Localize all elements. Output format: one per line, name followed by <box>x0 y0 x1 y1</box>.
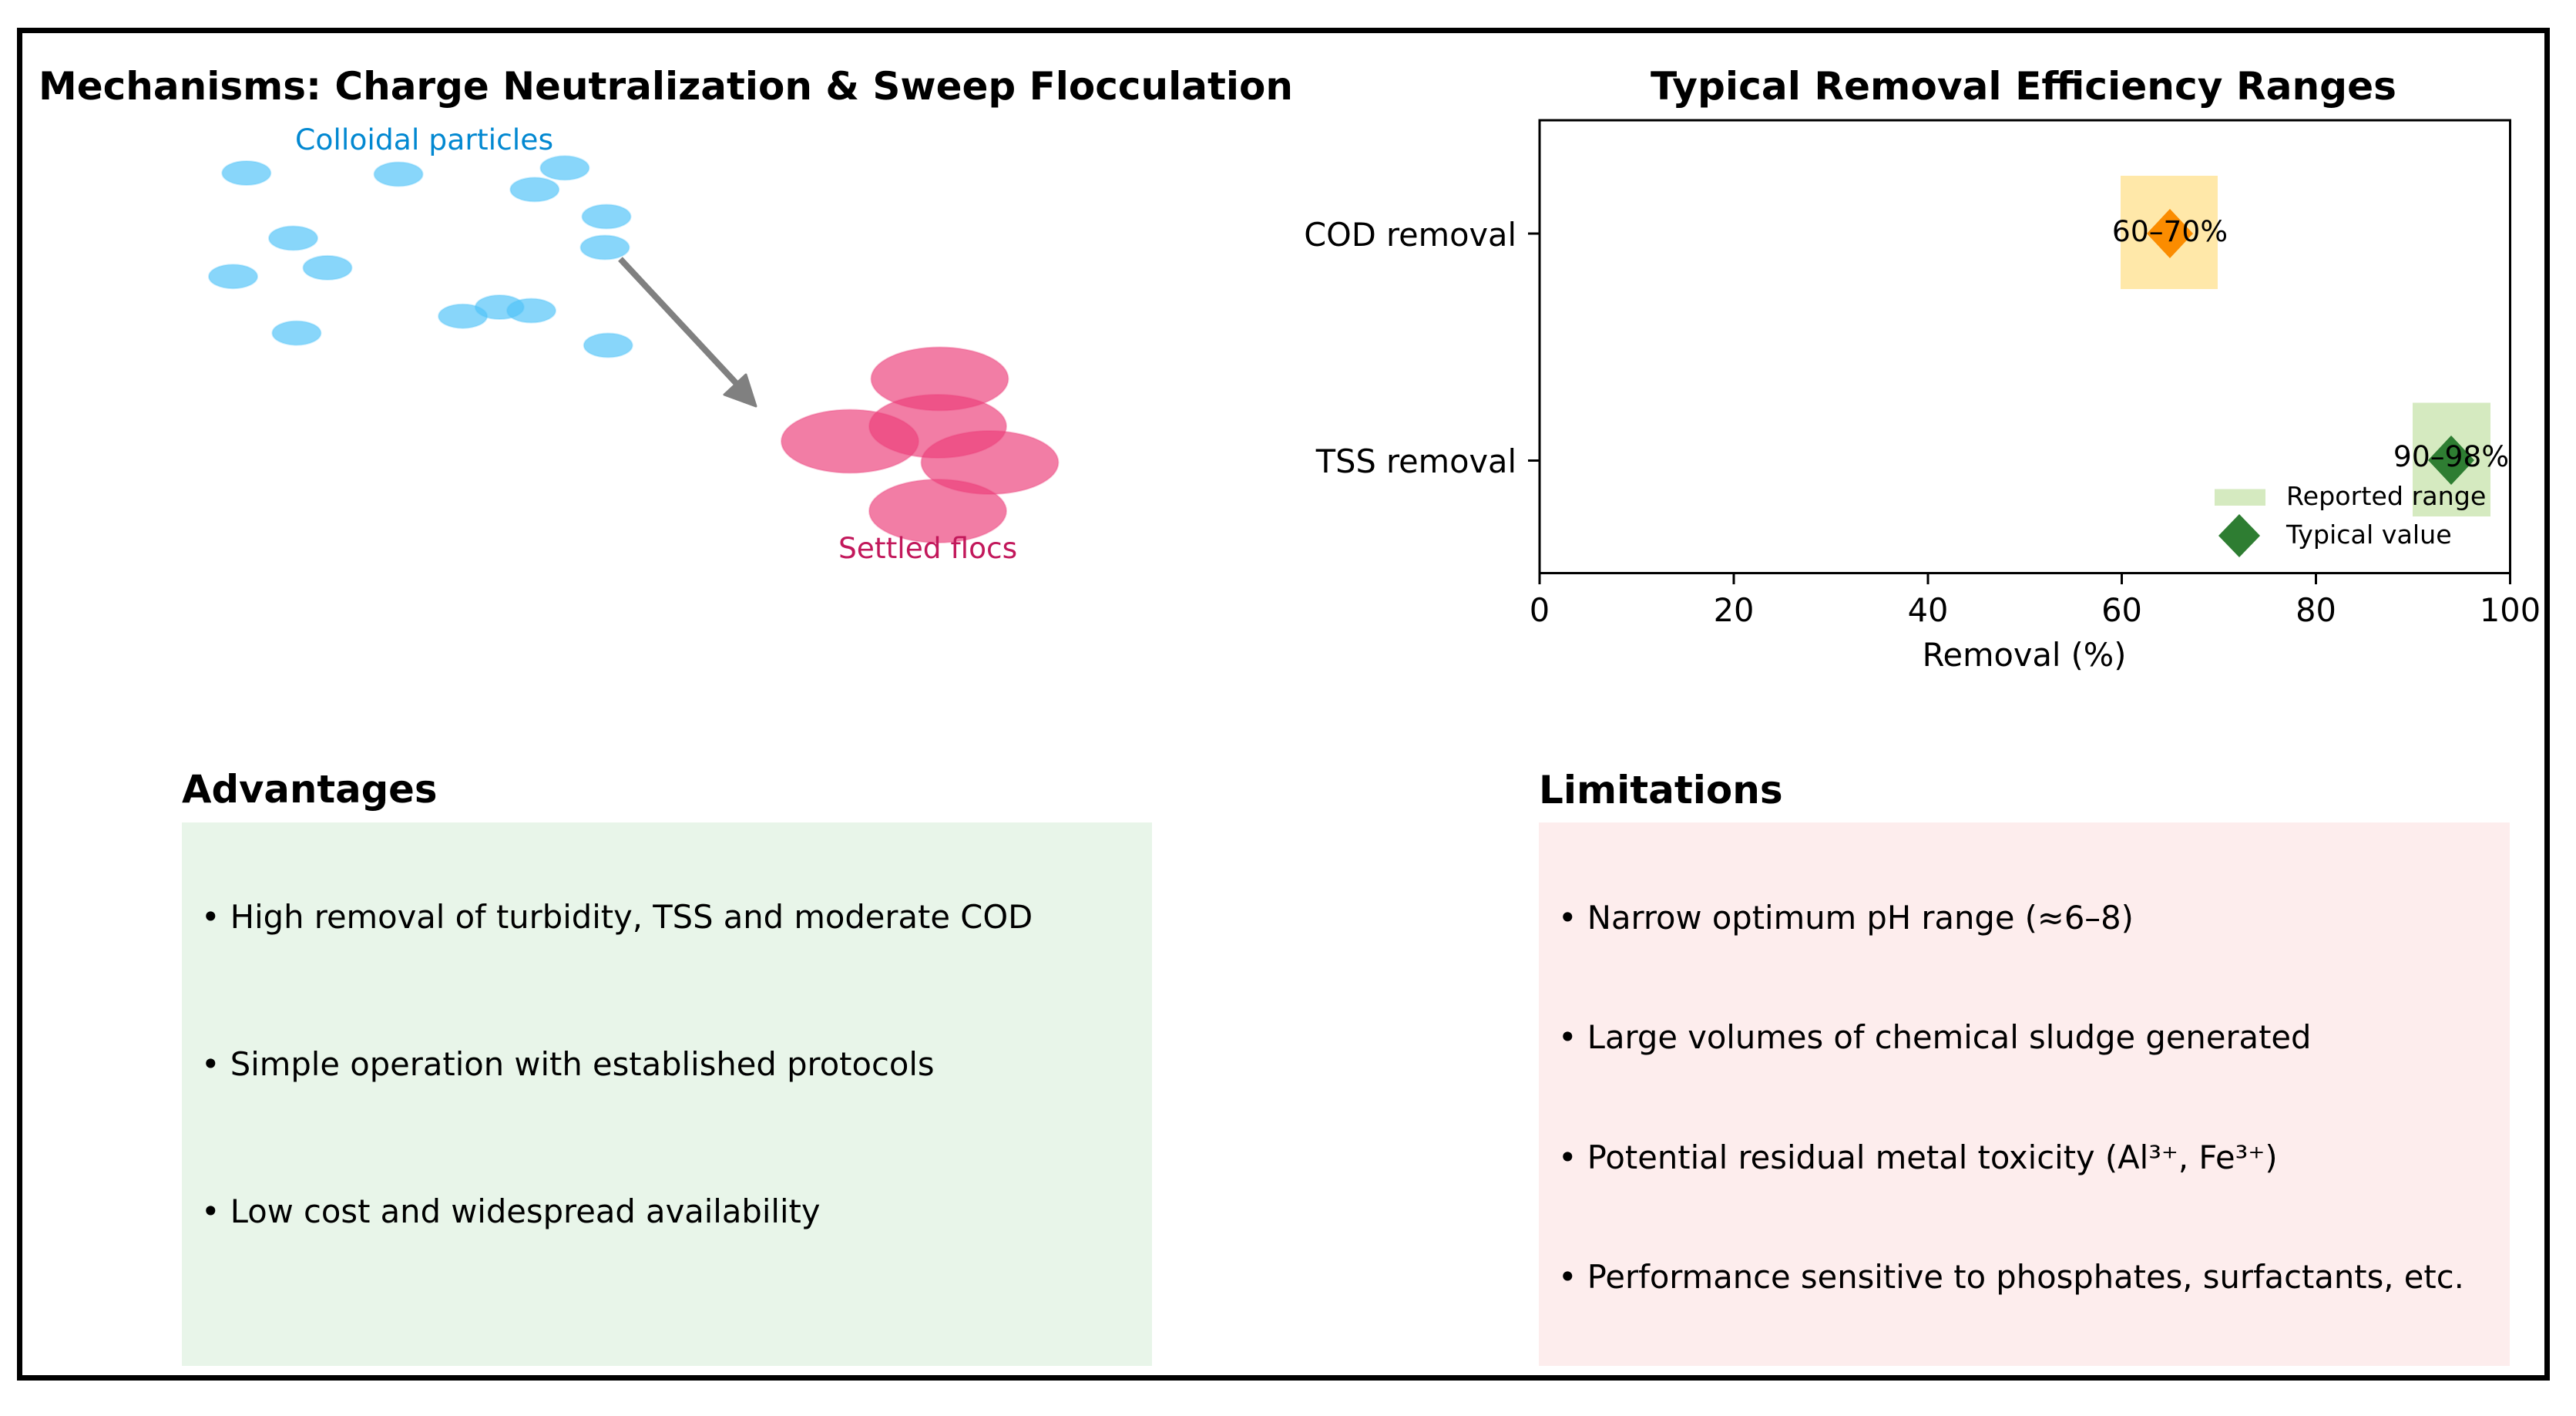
label: settled flocs: Settled flocs <box>838 531 1017 565</box>
limitation item 2: • Large volumes of chemical sludge generated <box>1558 1018 2311 1056</box>
colloidal particles <box>209 156 633 358</box>
x axis ticks and labels: 100 <box>2480 591 2541 629</box>
heading: mechanisms: Mechanisms: Charge Neutralization & Sweep Flocculation <box>39 64 1293 109</box>
marker: TSS typical value <box>2428 436 2474 485</box>
x axis ticks and labels: 0 <box>1530 591 1550 629</box>
legend: Typical value <box>2285 520 2452 550</box>
range bar: TSS 90-98% <box>2413 402 2490 516</box>
y axis labels <box>1304 216 1540 480</box>
heading: limitations: Limitations <box>1539 768 1783 812</box>
settled flocs <box>781 347 1059 543</box>
label: colloidal particles: Colloidal particles <box>295 123 553 156</box>
limitations box <box>1539 822 2510 1366</box>
advantage item 2: • Simple operation with established protocols <box>201 1045 935 1083</box>
heading: advantages: Advantages <box>182 767 437 812</box>
legend <box>2215 481 2486 557</box>
limitation item 3: • Potential residual metal toxicity (Al³⁺, Fe³⁺) <box>1558 1139 2278 1176</box>
arrow: particles to flocs <box>620 259 756 406</box>
x axis ticks and labels: 80 <box>2296 591 2336 629</box>
x axis ticks and labels: 20 <box>1714 591 1754 629</box>
legend: Reported range <box>2286 481 2486 511</box>
limitation item 4: • Performance sensitive to phosphates, surfactants, etc. <box>1558 1258 2464 1296</box>
heading: removal efficiency: Typical Removal Efficiency Ranges <box>1651 64 2396 109</box>
range bar: COD 60-70% <box>2121 176 2218 289</box>
x axis title: Removal (%) <box>1923 636 2126 674</box>
advantage item 1: • High removal of turbidity, TSS and moderate COD <box>201 898 1033 936</box>
limitation item 1: • Narrow optimum pH range (≈6–8) <box>1558 899 2134 937</box>
panel: advantages <box>182 767 1152 1366</box>
x axis ticks and labels: 40 <box>1908 591 1948 629</box>
marker: COD typical value <box>2147 209 2193 258</box>
data label: TSS: 90–98% <box>2393 439 2509 473</box>
data label: COD: 60–70% <box>2112 214 2228 248</box>
y axis labels: COD removal <box>1304 216 1516 254</box>
x axis ticks and labels <box>1530 573 2541 629</box>
y axis labels: TSS removal <box>1315 442 1516 480</box>
advantages box <box>182 822 1152 1366</box>
panel: mechanisms <box>39 64 1293 565</box>
advantage item 3: • Low cost and widespread availability <box>201 1192 820 1230</box>
panel: removal efficiency chart <box>1304 64 2541 674</box>
x axis ticks and labels: 60 <box>2101 591 2142 629</box>
panel: limitations <box>1539 768 2510 1366</box>
axes box <box>1540 120 2511 573</box>
